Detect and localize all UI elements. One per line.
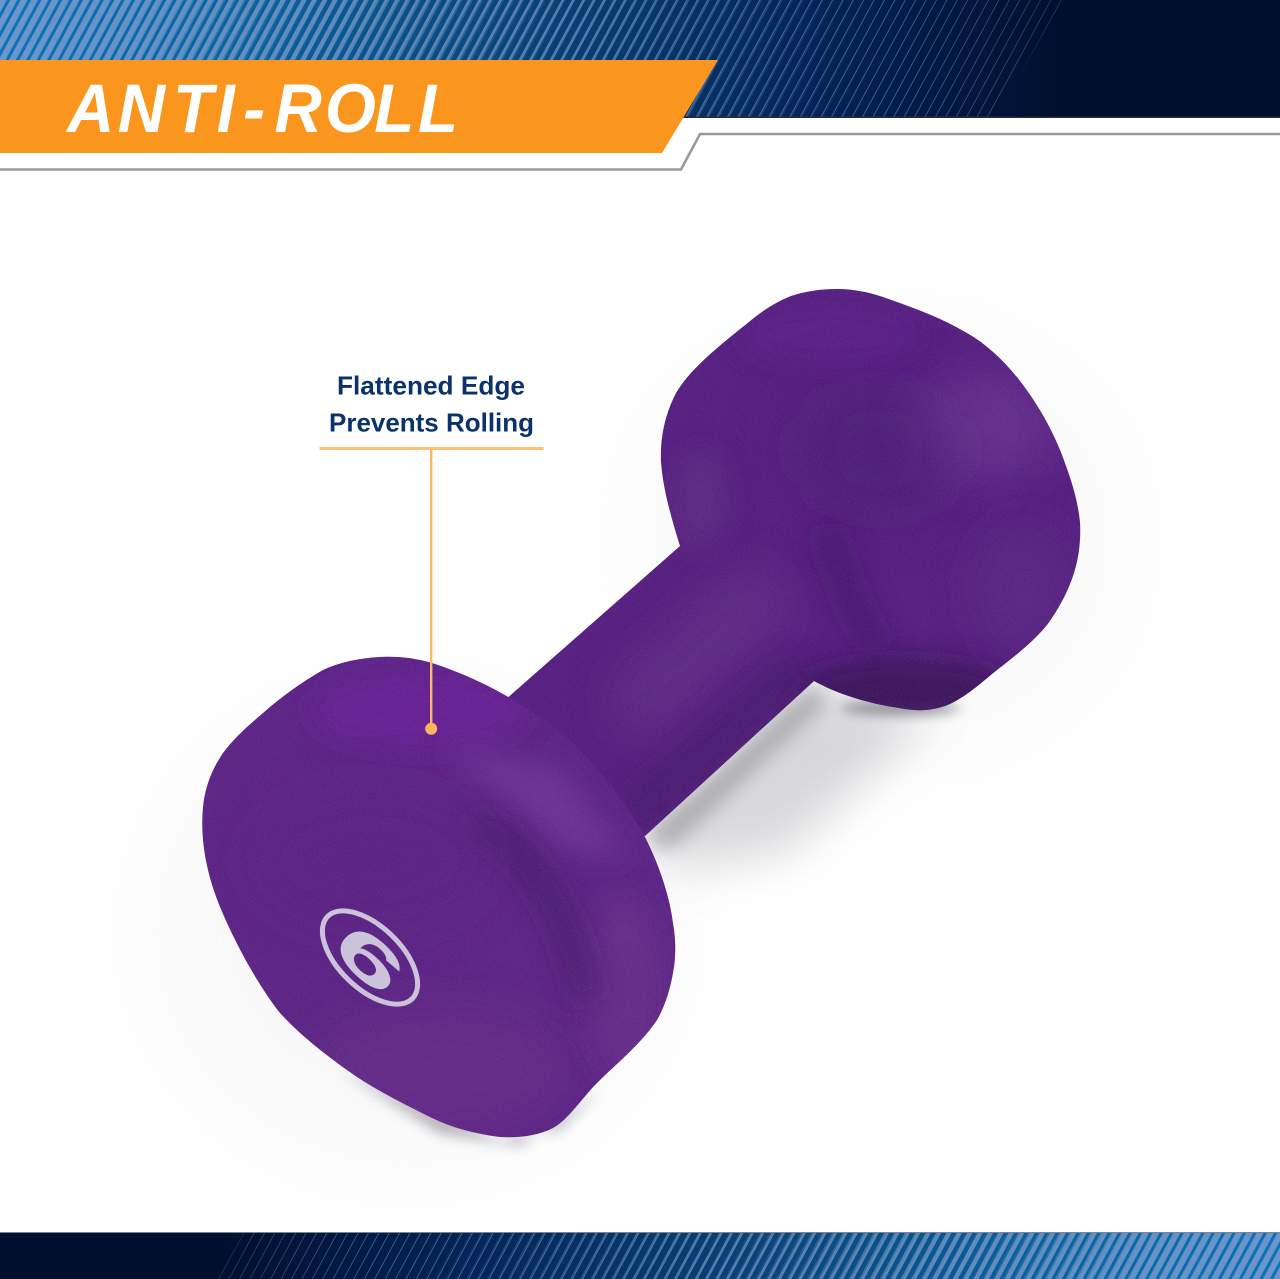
orange title banner xyxy=(0,60,718,153)
footer band with diagonal stripes xyxy=(0,1232,1280,1279)
callout: flattened edge xyxy=(320,370,544,735)
weight marking: 6 in a ring: 6 xyxy=(319,910,420,1008)
handle highlight xyxy=(640,598,766,707)
header grey outline xyxy=(0,134,1280,170)
callout text: Prevents Rolling xyxy=(329,408,534,438)
dumbbell product illustration xyxy=(202,289,1080,1154)
callout leader line xyxy=(320,447,544,735)
weight marking: 6 in a ring xyxy=(306,894,434,1021)
soft floor shadows xyxy=(145,315,1135,1175)
header white notch under the banner xyxy=(0,118,1280,168)
near weight head xyxy=(200,650,680,1140)
header band with diagonal stripes xyxy=(0,0,1280,118)
far weight head and handle xyxy=(500,280,1090,840)
far head highlight xyxy=(915,373,1055,477)
title: ANTI-ROLL xyxy=(65,70,458,147)
callout text: Flattened Edge xyxy=(337,370,525,400)
